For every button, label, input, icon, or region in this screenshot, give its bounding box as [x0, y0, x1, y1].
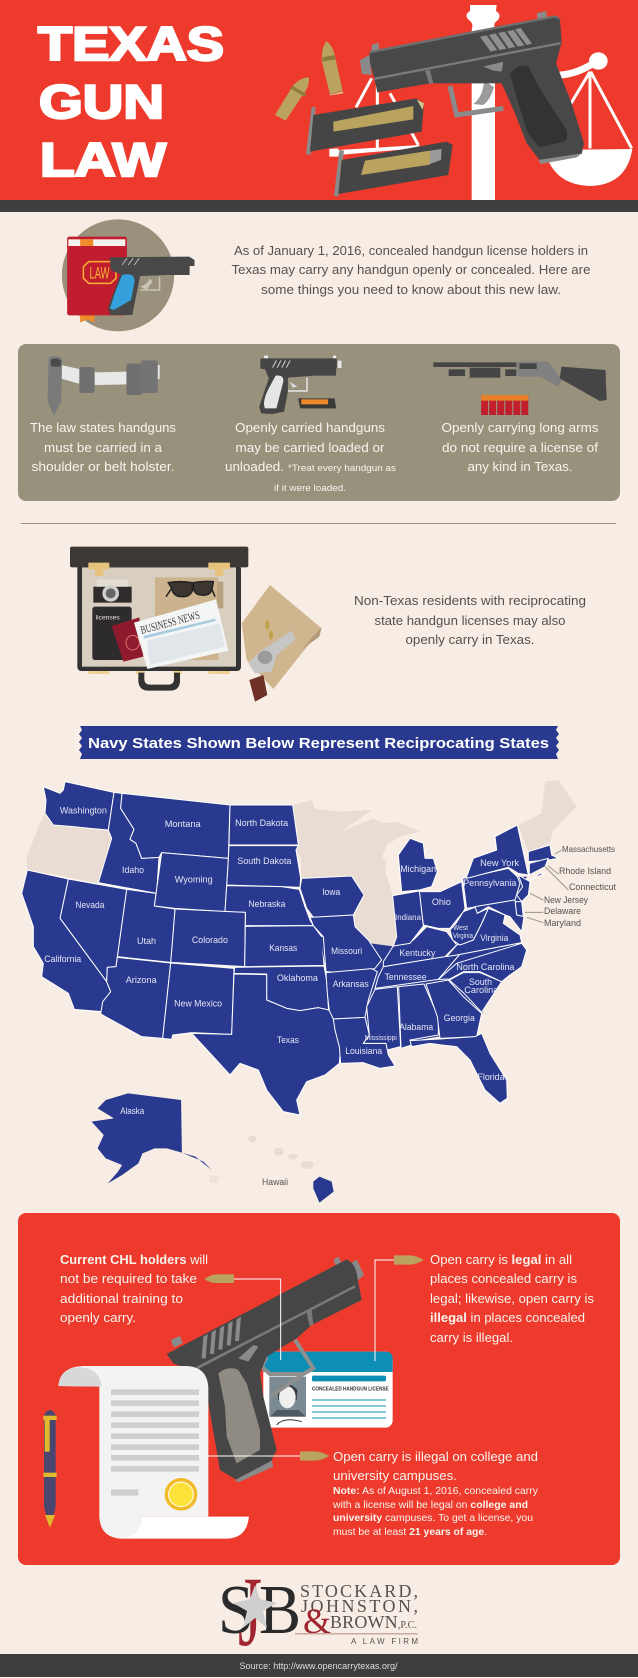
text: loaded or unloaded: Openly carried handguns: [235, 420, 386, 435]
state labels: Wyoming: [175, 874, 213, 886]
state labels: Ohio: [432, 897, 451, 908]
state labels: Mississippi: [365, 1035, 397, 1042]
text: loaded or unloaded: may be carried loaded or: [236, 440, 385, 455]
text: current CHL holders: additional training to: [60, 1291, 183, 1306]
state labels: Pennsylvania: [463, 878, 517, 889]
text: non-Texas residents: [354, 593, 586, 647]
state labels: Louisiana: [345, 1046, 383, 1057]
law firm logo: BROWN,P.C.: [330, 1612, 417, 1632]
state labels: Massachusetts: [562, 845, 615, 854]
contiguous states: [22, 780, 577, 1115]
intro text: some things you need to know about this new law.: [261, 282, 561, 297]
state labels: Oklahoma: [277, 973, 319, 984]
state labels: West: [453, 925, 468, 932]
state labels: Michigan: [400, 864, 436, 875]
state labels: Virginia: [453, 933, 473, 940]
text: holster: The law states handguns: [30, 420, 176, 435]
gun: [167, 1257, 364, 1482]
state labels: South Dakota: [237, 856, 292, 867]
state labels: New Jersey: [544, 895, 588, 906]
state labels: Missouri: [331, 946, 362, 957]
law firm logo: A LAW FIRM: [351, 1637, 418, 1646]
state labels: South: [469, 977, 492, 988]
magazine 1: [306, 98, 424, 155]
banner heading: Navy States Shown Below Represent Reciprocating States: [88, 735, 549, 752]
icon: open briefcase with revolver and folder: BUSINESS NEWS: [139, 609, 201, 637]
illustration: handgun, license card, scroll and pen: [43, 1255, 424, 1539]
title: [38, 17, 224, 186]
text: long arms: do not require a license of: [442, 440, 598, 455]
text: holster: must be carried in a: [44, 440, 163, 455]
text: current CHL holders: openly carry.: [60, 1310, 136, 1325]
intro text: [232, 243, 590, 297]
icon: handgun and magazine: [259, 356, 341, 414]
text: non-Texas residents: Non-Texas residents with reciprocating: [354, 593, 586, 608]
state labels: Alaska: [120, 1106, 145, 1117]
state labels: New Mexico: [174, 998, 222, 1010]
law firm logo: JOHNSTON,: [301, 1596, 418, 1616]
state labels: North Dakota: [235, 818, 289, 829]
illustration: scales of justice, handgun, magazines and bullets: [275, 5, 632, 200]
magazine 2: [334, 142, 453, 197]
callout connectors and bullets: [204, 1255, 424, 1461]
title: GUN: [39, 75, 164, 128]
footer bar with source: Source: http://www.opencarrytexas.org/: [240, 1661, 398, 1672]
banner heading: [79, 726, 559, 759]
text: legal and illegal places: Open carry is legal in all: [430, 1252, 572, 1267]
state labels: Arizona: [126, 975, 157, 986]
icon: law book and handgun: LAW: [90, 264, 110, 282]
state labels: Hawaii: [262, 1177, 288, 1188]
state labels: Maryland: [544, 918, 581, 929]
text: legal and illegal places: carry is illegal.: [430, 1330, 513, 1345]
state labels: Rhode Island: [559, 866, 611, 877]
text: legal and illegal places: places concealed carry is: [430, 1271, 577, 1286]
state labels: Florida: [478, 1072, 505, 1083]
state labels: Texas: [277, 1035, 299, 1046]
state labels: North Carolina: [456, 962, 515, 973]
state labels: Virginia: [480, 933, 509, 944]
license card: CONCEALED HANDGUN LICENSE: [312, 1387, 389, 1393]
state labels: Washington: [60, 806, 107, 816]
state labels: Utah: [137, 936, 156, 947]
state labels: Kansas: [269, 943, 297, 954]
text: college campuses: Note: As of August 1, 2016, concealed carry: [333, 1485, 539, 1497]
state labels: California: [44, 954, 82, 965]
state labels: Indiana: [395, 912, 421, 922]
text: non-Texas residents: openly carry in Texas.: [406, 632, 534, 647]
state labels: Arkansas: [333, 979, 369, 990]
icon: open briefcase with revolver and folder: licenses: [96, 614, 120, 621]
text: loaded or unloaded: *Treat every handgun as: [288, 463, 397, 473]
text: college campuses: with a license will be legal on college and: [332, 1499, 528, 1511]
icon: shotgun and shells: [433, 362, 607, 415]
text: current CHL holders: [60, 1252, 208, 1325]
text: long arms: Openly carrying long arms: [442, 420, 599, 435]
law firm logo: &: [303, 1601, 331, 1641]
state labels: Iowa: [322, 887, 341, 898]
license card: [263, 1352, 393, 1428]
text: holster: [30, 420, 176, 474]
law firm logo: J: [238, 1556, 262, 1667]
state labels: Colorado: [192, 935, 228, 946]
icon: holster belt: [48, 356, 160, 416]
pen: [43, 1410, 57, 1528]
reciprocating states: [22, 782, 558, 1115]
state labels: Carolina: [464, 985, 499, 996]
title: LAW: [40, 133, 167, 186]
text: loaded or unloaded: [225, 420, 397, 493]
text: legal and illegal places: illegal in places concealed: [430, 1310, 585, 1325]
text: loaded or unloaded: if it were loaded.: [274, 483, 346, 493]
law firm logo: [218, 1556, 418, 1667]
law firm logo: S: [218, 1572, 254, 1649]
title: TEXAS: [38, 17, 224, 70]
text: long arms: any kind in Texas.: [468, 459, 572, 474]
panel: carry rules: [18, 344, 620, 501]
state labels: [44, 806, 616, 1188]
state labels: Alabama: [399, 1022, 434, 1033]
text: college campuses: Open carry is illegal on college and: [333, 1449, 538, 1464]
intro text: As of January 1, 2016, concealed handgun license holders in: [234, 243, 588, 258]
icon: open briefcase with revolver and folder: [70, 547, 322, 702]
state labels: Nevada: [75, 900, 105, 911]
state labels: Nebraska: [248, 899, 286, 910]
text: holster: shoulder or belt holster.: [32, 459, 174, 474]
text: college campuses: [332, 1449, 539, 1538]
text: current CHL holders: Current CHL holders will: [60, 1252, 208, 1267]
Alaska and Hawaii: [92, 1093, 334, 1203]
panel: open carry facts: [18, 1213, 620, 1565]
law firm logo: B: [259, 1572, 301, 1649]
text: current CHL holders: not be required to take: [60, 1271, 197, 1286]
state labels: Idaho: [122, 865, 144, 876]
text: long arms: [442, 420, 599, 474]
intro text: Texas may carry any handgun openly or concealed. Here are: [232, 262, 590, 277]
text: legal and illegal places: legal; likewise, open carry is: [430, 1291, 594, 1306]
state labels: Delaware: [544, 906, 581, 917]
header banner: [0, 0, 638, 212]
text: college campuses: university campuses. To get a license, you: [333, 1512, 533, 1524]
map of United States: [22, 780, 616, 1203]
text: college campuses: must be at least 21 years of age.: [333, 1526, 487, 1538]
state labels: Montana: [165, 819, 201, 830]
icon: law book and handgun: [62, 219, 194, 331]
state labels: Kentucky: [399, 948, 436, 959]
law firm logo: STOCKARD,: [300, 1581, 418, 1601]
text: college campuses: university campuses.: [333, 1468, 457, 1483]
scroll document: [58, 1366, 249, 1539]
state labels: Tennessee: [385, 972, 427, 983]
bullets: [275, 41, 343, 121]
text: loaded or unloaded: unloaded.: [225, 459, 284, 474]
text: legal and illegal places: [430, 1252, 594, 1345]
footer bar with source: [0, 1654, 638, 1677]
state labels: New York: [480, 858, 519, 869]
text: non-Texas residents: state handgun licenses may also: [374, 613, 566, 628]
gun: [360, 11, 584, 164]
state labels: Georgia: [444, 1013, 475, 1024]
state labels: Connecticut: [569, 882, 616, 893]
